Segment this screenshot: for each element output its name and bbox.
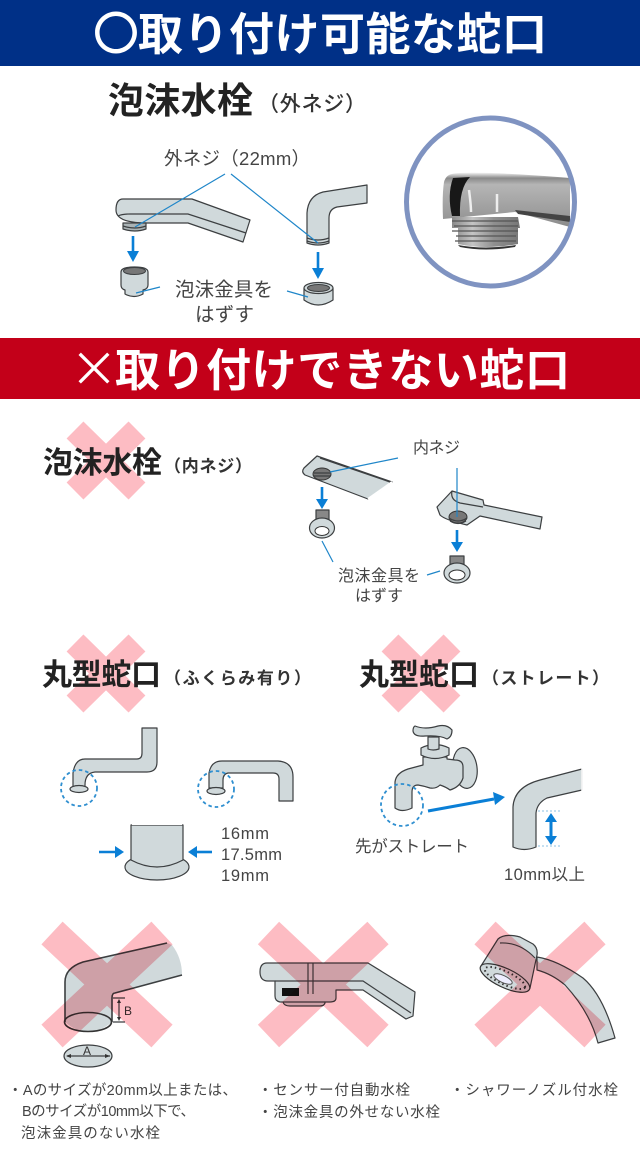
heading: straight: 丸型蛇口 <box>359 659 479 692</box>
banner: installable faucets: 〇 <box>93 8 139 60</box>
sizes: 17.5mm <box>221 846 282 864</box>
diagram: spout with A and B: B <box>124 1004 132 1018</box>
labels: straight <box>355 837 585 884</box>
panel: round faucet with bulge <box>42 643 311 885</box>
diagram: internal thread faucets <box>303 456 542 583</box>
labels: internal thread: 泡沫金具を <box>338 567 420 585</box>
cross mark <box>485 933 595 1036</box>
labels: internal thread: 内ネジ <box>413 439 460 457</box>
note: shower nozzle: ・シャワーノズル付水栓 <box>450 1082 618 1099</box>
diagram: straight tap <box>381 726 582 850</box>
diagram: sensor faucet <box>260 963 415 1019</box>
labels: internal thread: はずす <box>355 587 403 605</box>
photo: faucet with external thread in circle <box>406 118 574 286</box>
heading: foam faucet external thread: 泡沫水栓 <box>108 80 253 121</box>
heading: bulged <box>42 659 311 692</box>
note: large spout condition: 泡沫金具のない水栓 <box>21 1125 160 1142</box>
labels: external thread: はずす <box>195 304 254 326</box>
cross mark <box>75 430 137 491</box>
panel: round faucet straight <box>355 643 609 884</box>
cross mark <box>390 643 452 704</box>
sizes: 16mm <box>221 825 269 843</box>
cross mark <box>268 933 378 1036</box>
panel: shower nozzle <box>477 933 615 1043</box>
diagram: spout with A and B: A <box>83 1044 91 1058</box>
labels: internal thread <box>338 439 460 605</box>
heading: bulged: 丸型蛇口 <box>42 659 161 692</box>
sizes: 19mm <box>221 867 269 885</box>
heading: straight: （ストレート） <box>482 669 609 688</box>
heading: straight <box>359 659 609 692</box>
panel: large spout <box>52 933 182 1067</box>
cross mark <box>75 643 137 704</box>
labels: straight: 先がストレート <box>355 837 469 856</box>
banner: installable faucets <box>0 0 640 66</box>
diagram: bulged faucets <box>61 728 293 880</box>
note: sensor and fixed <box>258 1082 440 1121</box>
cross mark <box>52 933 162 1036</box>
diagram: spout with A and B <box>64 943 182 1067</box>
note: large spout condition <box>8 1082 237 1142</box>
heading: foam faucet external thread: （外ネジ） <box>258 93 366 116</box>
banner: non-installable faucets <box>0 330 640 400</box>
banner: installable faucets: 取り付け可能な蛇口 <box>138 9 547 60</box>
heading: internal thread: 泡沫水栓 <box>43 447 162 480</box>
diagram: external thread faucets <box>116 174 367 305</box>
panel: sensor faucet <box>260 933 415 1036</box>
heading: internal thread <box>43 447 252 480</box>
banner: non-installable faucets: × <box>70 330 118 400</box>
labels: external thread: 外ネジ（22mm） <box>164 148 310 169</box>
diagram: shower faucet <box>477 935 615 1043</box>
heading: foam faucet external thread <box>108 80 366 121</box>
labels: straight: 10mm以上 <box>504 865 585 884</box>
note: sensor and fixed: ・泡沫金具の外せない水栓 <box>258 1104 440 1121</box>
banner: non-installable faucets: 取り付けできない蛇口 <box>115 345 570 396</box>
note: large spout condition: Bのサイズが10mm以下で、 <box>22 1103 195 1120</box>
note: large spout condition: ・Aのサイズが20mm以上または、 <box>8 1082 237 1099</box>
panel: foam faucet internal thread <box>43 430 542 605</box>
heading: bulged: （ふくらみ有り） <box>164 669 311 688</box>
labels: external thread: 泡沫金具を <box>175 279 273 301</box>
sizes <box>221 825 282 885</box>
note: sensor and fixed: ・センサー付自動水栓 <box>258 1082 410 1099</box>
heading: internal thread: （内ネジ） <box>164 457 252 476</box>
labels: external thread <box>164 148 310 326</box>
